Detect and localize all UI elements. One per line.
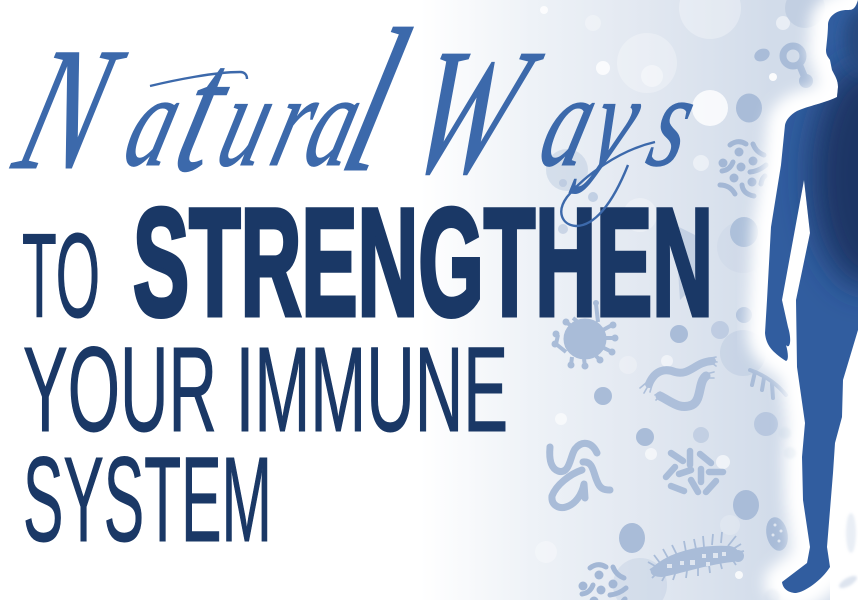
title: script line: N — [0, 12, 141, 207]
title: script line: s — [635, 49, 712, 195]
title: script line: a — [527, 49, 614, 195]
infographic canvas: TO — [22, 209, 100, 343]
title: script line: u — [205, 49, 291, 195]
white area right of legs — [830, 330, 858, 600]
solid blue spheres — [594, 94, 762, 553]
icon: ring microbe — [752, 46, 813, 88]
body glow — [765, 0, 858, 593]
title: script line: W — [389, 13, 557, 212]
title: script swashes — [150, 72, 655, 226]
icon: oval bacterium — [763, 515, 791, 553]
icon: squiggly spirochete — [550, 443, 610, 508]
title: script line: t — [158, 11, 252, 210]
icon: cocci cluster lower — [578, 565, 626, 600]
title: script line: y — [568, 49, 658, 195]
icon: worm microbes — [640, 357, 717, 407]
icon: spiny rod bacterium — [648, 532, 744, 581]
icon: bacterium behind glow — [750, 370, 786, 398]
pale smudges near the feet — [764, 427, 858, 600]
icon: virus blob — [552, 300, 618, 369]
icon: cocci cluster upper — [718, 142, 766, 196]
human silhouette — [765, 0, 858, 593]
bokeh light circles — [535, 0, 790, 579]
title: script line: r — [258, 49, 335, 195]
title: heading system: SYSTEM — [23, 431, 272, 567]
translucent blue cells — [546, 0, 825, 600]
icon: rod bacteria cluster — [666, 451, 723, 492]
title: script line: a — [111, 49, 198, 195]
title: script line: a — [292, 49, 378, 195]
